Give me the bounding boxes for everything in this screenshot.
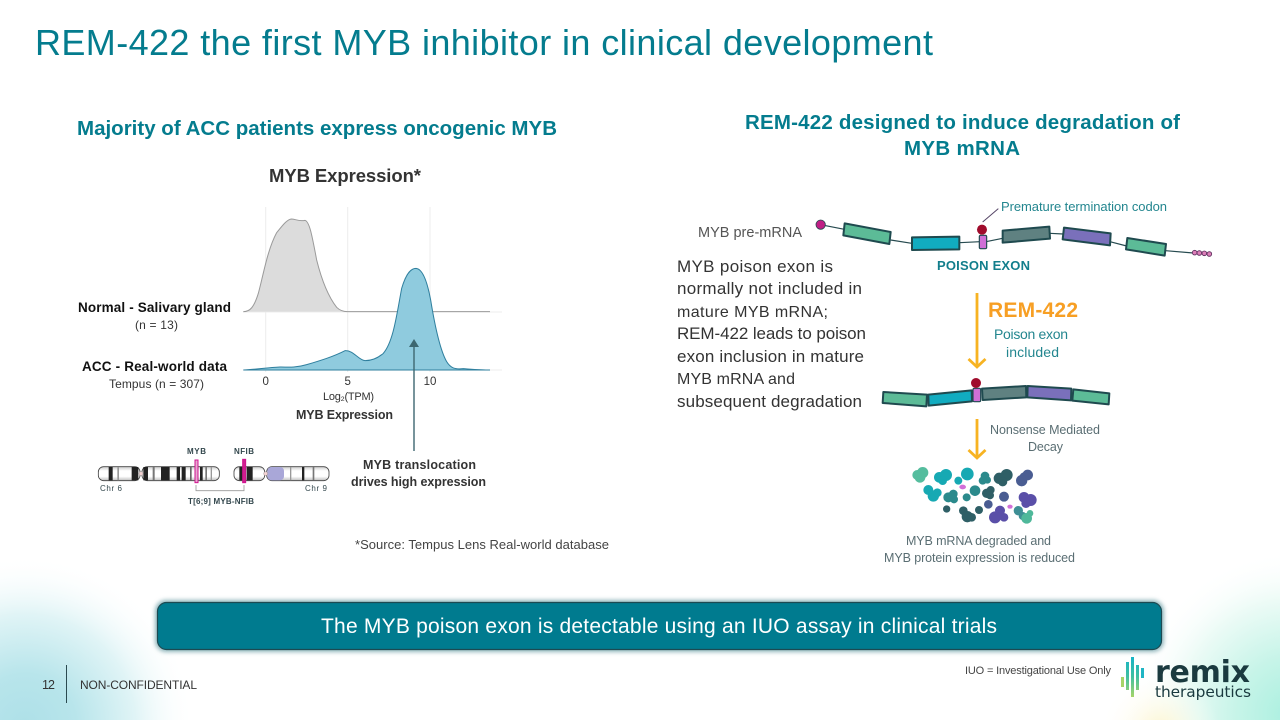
footnote: IUO: IUO = Investigational Use Only (965, 665, 1112, 677)
label: poison exon: POISON EXON (937, 258, 1030, 273)
arrow: REM-422 step (968, 293, 986, 367)
row label: ACC: Tempus (n = 307) (109, 377, 204, 391)
row label: normal (78, 300, 231, 332)
row label: normal: Normal - Salivary gland (78, 300, 231, 315)
footer (42, 665, 197, 703)
label: nonsense mediated decay: Decay (1028, 440, 1064, 454)
body text: poison exon explanation: normally not included in (677, 279, 862, 298)
title: REM-422 the first MYB inhibitor in clinical development (35, 22, 933, 63)
heading: designed to induce degradation: MYB mRNA (904, 137, 1020, 160)
axis labels (262, 376, 436, 403)
label: degraded outcome: MYB protein expression is reduced (884, 551, 1075, 565)
row label: ACC: ACC - Real-world data (82, 359, 227, 374)
label: REM-422: REM-422 (988, 299, 1078, 322)
chromosome diagram: Chr 9 (305, 484, 328, 493)
label: degraded outcome: MYB mRNA degraded and (906, 534, 1051, 548)
logo: remix therapeutics (1121, 655, 1251, 701)
confidentiality notice: NON-CONFIDENTIAL (80, 678, 197, 692)
logo wordmark: remix (1155, 655, 1250, 690)
label: MYB pre-mRNA: MYB pre-mRNA (698, 225, 802, 241)
row label: normal: (n = 13) (135, 318, 178, 332)
mature mRNA with poison exon (883, 378, 1109, 406)
body text: poison exon explanation: subsequent degradation (677, 392, 862, 411)
body text: poison exon explanation: REM-422 leads to poison (677, 324, 866, 343)
chromosome 6 (98, 467, 219, 481)
label: premature termination codon: Premature termination codon (1001, 199, 1167, 214)
chart title: MYB Expression* (269, 165, 422, 186)
body text: poison exon explanation: MYB mRNA and (677, 371, 795, 388)
callout banner: The MYB poison exon is detectable using an IUO assay in clinical trials (321, 615, 997, 638)
arrow: nonsense mediated decay step (968, 419, 986, 458)
label: degraded outcome (884, 534, 1075, 565)
axis labels: 5 (344, 376, 351, 388)
heading: designed to induce degradation (745, 111, 1180, 160)
label: nonsense mediated decay: Nonsense Mediated (990, 423, 1100, 437)
normal salivary gland density (243, 219, 490, 312)
source note: *Source: Tempus Lens Real-world database (355, 537, 609, 552)
body text: poison exon explanation: MYB poison exon is (677, 257, 833, 276)
logo mark (1121, 657, 1144, 697)
callout: MYB translocation (351, 458, 486, 489)
chromosome 9 (234, 467, 329, 481)
label: poison exon included (994, 326, 1068, 360)
chromosome diagram: MYB (187, 447, 206, 456)
ACC real-world density (243, 268, 490, 370)
chromosome diagram: T[6;9] MYB-NFIB (188, 497, 254, 506)
arrow: translocation to peak (409, 339, 419, 451)
label: poison exon included: Poison exon (994, 326, 1068, 342)
logo: remix therapeutics: therapeutics (1155, 683, 1251, 701)
chromosome diagram: Chr 6 (100, 484, 123, 493)
panel: mechanism of REM-422 (677, 111, 1212, 565)
row label: ACC (82, 359, 227, 391)
axis labels: 10 (424, 376, 436, 388)
callout: MYB translocation: drives high expression (351, 475, 486, 489)
axis labels: Log₂(TPM) (323, 391, 374, 403)
translocation markers (195, 460, 198, 483)
callout banner (155, 600, 1164, 652)
label: nonsense mediated decay (990, 423, 1100, 454)
ridgeline density chart (243, 207, 502, 403)
panel: MYB expression (77, 117, 609, 552)
body text: poison exon explanation (677, 257, 866, 411)
page number: 12 (42, 678, 55, 692)
callout: MYB translocation: MYB translocation (363, 458, 476, 472)
body text: poison exon explanation: mature MYB mRNA; (677, 304, 828, 321)
pre-mRNA strand (816, 209, 1212, 256)
x axis caption: MYB Expression (296, 408, 393, 422)
chromosome diagram: NFIB (234, 447, 254, 456)
degraded mRNA fragments (914, 468, 1035, 522)
heading: majority of ACC patients: Majority of ACC patients express oncogenic MYB (77, 117, 557, 140)
axis labels: 0 (262, 376, 269, 388)
label: poison exon included: included (1006, 344, 1059, 360)
body text: poison exon explanation: exon inclusion in mature (677, 347, 864, 366)
chromosome diagram (98, 447, 329, 506)
heading: designed to induce degradation: REM-422 designed to induce degradation of (745, 111, 1180, 134)
